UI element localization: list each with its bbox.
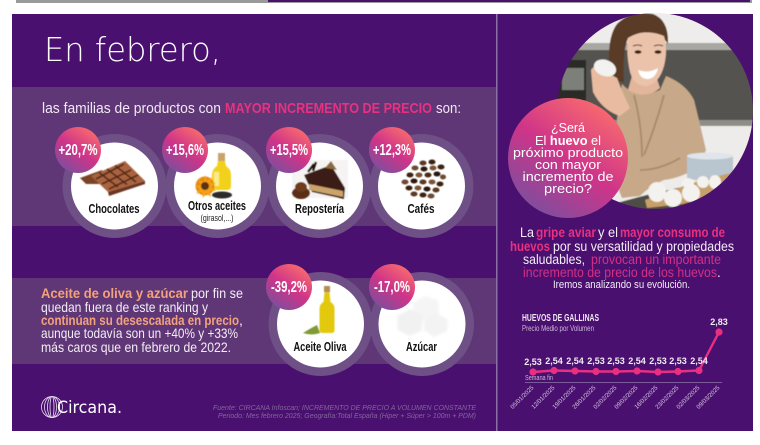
badge: -39,2% bbox=[271, 279, 307, 296]
callout: question about the egg: próximo producto bbox=[513, 145, 623, 160]
callout: question about the egg: ¿Será bbox=[551, 120, 586, 135]
product: aceite oliva bbox=[266, 264, 372, 376]
text block: avian flu explanation: y el bbox=[598, 225, 618, 240]
data points bbox=[529, 328, 723, 376]
text block: olive oil and sugar: aunque todavía son un +40% y +33% bbox=[41, 325, 238, 341]
date labels: 26/01/2025 bbox=[572, 385, 598, 411]
text block: avian flu explanation: mayor consumo de bbox=[620, 225, 725, 240]
icon: chocolate bar bbox=[80, 161, 145, 196]
label: Azúcar bbox=[406, 339, 437, 354]
callout: question about the egg bbox=[508, 98, 628, 218]
x axis bbox=[525, 382, 722, 384]
product: reposteria bbox=[266, 127, 372, 238]
date labels: 05/01/2025 bbox=[510, 385, 536, 411]
text block: avian flu explanation bbox=[510, 225, 734, 291]
callout: question about the egg: con mayor bbox=[535, 157, 602, 172]
woman's hair bbox=[609, 13, 668, 82]
product: otros aceites bbox=[162, 127, 270, 238]
date labels: 02/02/2025 bbox=[593, 385, 619, 411]
date labels: 19/01/2025 bbox=[552, 385, 578, 411]
label: Aceite Oliva bbox=[294, 339, 347, 354]
data values: 2,54 bbox=[566, 356, 584, 366]
text block: olive oil and sugar: por fin se bbox=[191, 285, 243, 301]
data values bbox=[524, 317, 728, 367]
text block: olive oil and sugar: continúan su desescalada en precio bbox=[41, 312, 239, 328]
date labels: 16/02/2025 bbox=[634, 385, 660, 411]
panel: decreasing products band bbox=[12, 278, 496, 364]
woman's face bbox=[627, 32, 666, 86]
egg in hand bbox=[593, 58, 617, 78]
date labels: 02/03/2025 bbox=[676, 385, 702, 411]
icon: sugar cubes bbox=[397, 296, 448, 337]
icon: olive oil bottle bbox=[303, 286, 334, 334]
source note: Fuente: CIRCANA Infoscan; INCREMENTO DE PRECIO A VOLUMEN CONSTANTE bbox=[213, 403, 477, 412]
data values: 2,54 bbox=[628, 356, 646, 366]
data values: 2,53 bbox=[607, 356, 625, 366]
text block: olive oil and sugar: más caros que en febrero de 2022. bbox=[41, 339, 231, 355]
date labels: 09/03/2025 bbox=[696, 385, 722, 411]
badge: -17,0% bbox=[374, 279, 410, 296]
badge: +12,3% bbox=[373, 142, 411, 159]
woman's bathrobe bbox=[614, 76, 706, 198]
callout: question about the egg: El huevo el bbox=[535, 133, 601, 148]
date labels: 23/02/2025 bbox=[655, 385, 681, 411]
data values: 2,53 bbox=[587, 356, 605, 366]
data values: 2,53 bbox=[649, 356, 667, 366]
product: cafes bbox=[369, 127, 474, 238]
label: Otros aceites bbox=[188, 198, 246, 213]
data values: 2,53 bbox=[669, 356, 687, 366]
callout: question about the egg: incremento de bbox=[522, 169, 614, 184]
date labels: 12/01/2025 bbox=[531, 385, 557, 411]
icon: chocolate cake bbox=[292, 160, 348, 199]
text block: olive oil and sugar: , bbox=[239, 312, 243, 328]
chart title: HUEVOS DE GALLINAS bbox=[522, 313, 599, 324]
product: chocolates bbox=[55, 127, 166, 238]
band heading: MAYOR INCREMENTO DE PRECIO bbox=[225, 100, 432, 117]
panel: top products band bbox=[12, 87, 496, 226]
chart subtitle: Precio Medio por Volumen bbox=[522, 324, 594, 333]
data values: 2,54 bbox=[545, 356, 563, 366]
text block: avian flu explanation: provocan un importante bbox=[591, 252, 721, 267]
logo: Circana: Circana. bbox=[57, 398, 122, 418]
text block: avian flu explanation: Iremos analizando su evolución. bbox=[553, 279, 690, 291]
source note bbox=[213, 403, 477, 420]
text block: avian flu explanation: por su versatilidad y propiedades bbox=[553, 239, 734, 254]
line chart: huevos de gallinas bbox=[510, 313, 728, 411]
label: Cafés bbox=[408, 201, 434, 216]
text block: olive oil and sugar: quedan fuera de este ranking y bbox=[41, 299, 208, 315]
text block: avian flu explanation: incremento de precio de los huevos bbox=[523, 265, 717, 280]
text block: avian flu explanation: saludables, bbox=[523, 252, 585, 267]
text block: olive oil and sugar: Aceite de oliva y azúcar bbox=[41, 285, 189, 301]
icon: coffee beans bbox=[402, 160, 446, 198]
title: En febrero, bbox=[44, 30, 221, 69]
text block: olive oil and sugar bbox=[41, 285, 243, 355]
badge: +20,7% bbox=[58, 142, 98, 159]
text block: avian flu explanation: La bbox=[520, 225, 534, 240]
badge: +15,5% bbox=[270, 142, 308, 159]
text block: avian flu explanation: . bbox=[717, 265, 721, 280]
band heading: las familias de productos con bbox=[42, 100, 221, 117]
product: azucar bbox=[369, 264, 474, 376]
data values: 2,54 bbox=[690, 356, 708, 366]
axis caption: Semana fin bbox=[525, 375, 553, 382]
egg carton bbox=[645, 172, 735, 208]
vertical divider bbox=[496, 14, 498, 431]
band heading: son: bbox=[436, 100, 461, 117]
woman's hand bbox=[591, 66, 630, 116]
badge: +15,6% bbox=[166, 142, 204, 159]
product: otros aceites: (girasol,...) bbox=[200, 213, 234, 223]
label: Repostería bbox=[295, 201, 345, 216]
woman's neck bbox=[628, 76, 660, 95]
top page edge bbox=[16, 0, 752, 3]
label: Chocolates bbox=[88, 201, 140, 216]
text block: avian flu explanation: huevos bbox=[510, 239, 550, 254]
date labels bbox=[510, 385, 722, 411]
date labels: 09/02/2025 bbox=[614, 385, 640, 411]
icon: sunflower oil and flower bbox=[195, 153, 232, 198]
bowl bbox=[687, 156, 733, 182]
text block: avian flu explanation: gripe aviar bbox=[536, 225, 597, 240]
source note: Periodo: Mes febrero 2025; Geografía:Total España (Hiper + Súper > 100m + PDM) bbox=[218, 411, 476, 420]
photo: woman holding an egg bbox=[558, 13, 753, 209]
callout: question about the egg: precio? bbox=[544, 181, 592, 196]
data values: 2,53 bbox=[524, 357, 542, 367]
data line bbox=[533, 332, 719, 372]
data values: 2,83 bbox=[710, 317, 728, 327]
